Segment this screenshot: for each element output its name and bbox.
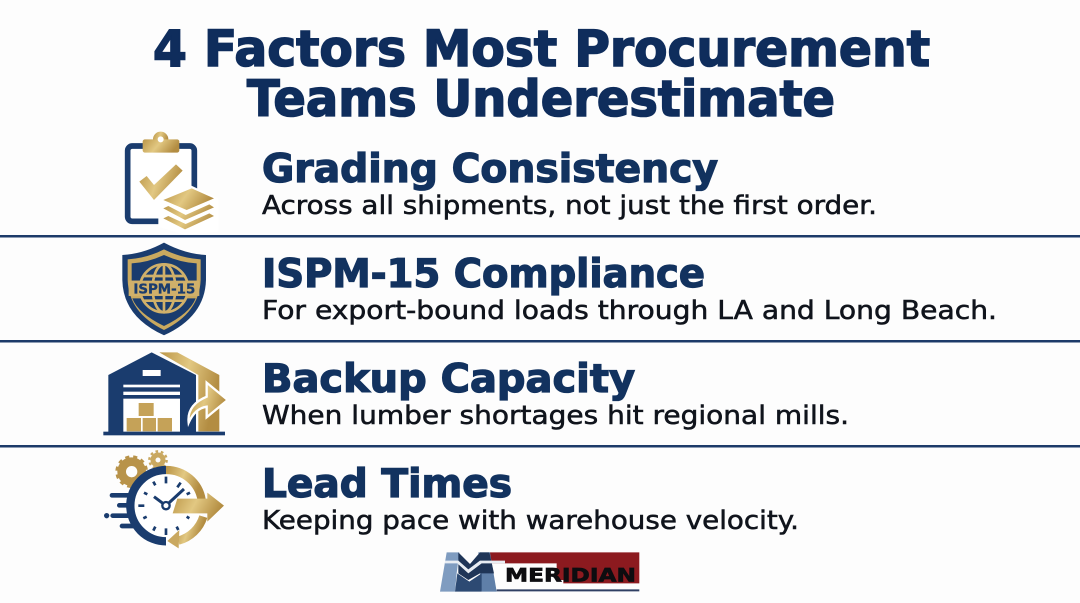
logo: meridian: MERIDIAN — [505, 566, 636, 587]
text: lead times description: Keeping pace with warehouse velocity. — [262, 506, 799, 536]
panel: ispm-15 compliance — [122, 243, 997, 335]
panel: backup capacity — [103, 352, 849, 435]
panel: grading consistency — [128, 132, 877, 235]
text: ispm-15 description: For export-bound loads through LA and Long Beach. — [262, 296, 997, 326]
panel: lead times — [104, 451, 799, 548]
title: Teams Underestimate — [247, 70, 835, 128]
icon: warehouse with outbound arrow — [103, 352, 228, 435]
title: 4 Factors Most Procurement — [153, 20, 930, 78]
icon: clock with gears and arrow — [104, 451, 224, 548]
icon: ispm-15 shield with globe: ISPM-15 — [133, 282, 195, 298]
logo: meridian — [440, 552, 639, 592]
heading: lead times: Lead Times — [262, 462, 512, 507]
icon: clipboard with check and stacked boards — [128, 132, 218, 235]
heading: grading consistency: Grading Consistency — [262, 147, 718, 192]
heading: backup capacity: Backup Capacity — [262, 357, 635, 402]
icon: ispm-15 shield with globe — [122, 243, 206, 335]
text: grading description: Across all shipments, not just the first order. — [262, 191, 877, 221]
title — [153, 20, 930, 128]
text: backup description: When lumber shortages hit regional mills. — [262, 401, 849, 431]
heading: ispm-15 compliance: ISPM-15 Compliance — [262, 252, 705, 297]
